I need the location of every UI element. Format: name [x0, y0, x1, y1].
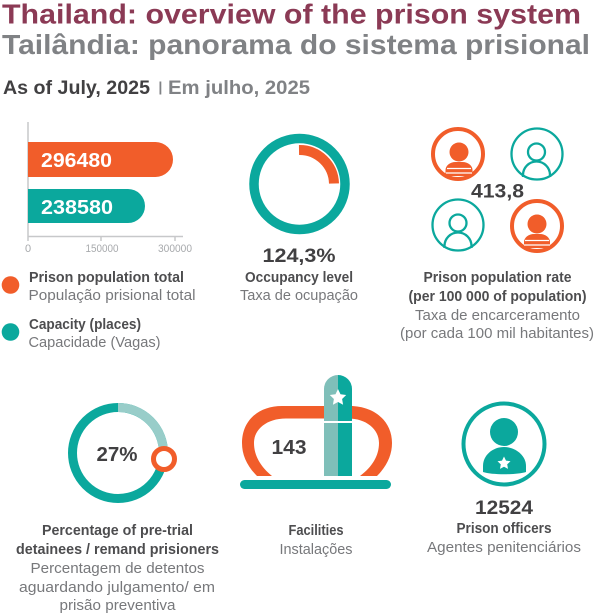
panel: pre-trial detainees: prisão preventiva — [60, 598, 176, 614]
pre-trial ring — [72, 408, 174, 498]
panel: facilities: 143 — [272, 437, 306, 459]
panel: prison population rate: (per 100 000 of population) — [408, 289, 587, 305]
panel: prison population rate: Prison population rate — [424, 270, 572, 286]
legend: Prison population total — [29, 270, 184, 286]
panel: pre-trial detainees — [16, 408, 219, 614]
date subtitle — [3, 78, 310, 99]
panel: occupancy level — [240, 138, 358, 304]
panel: pre-trial detainees: Percentagem de detentos — [30, 561, 204, 577]
panel: prison population rate: (por cada 100 mil habitantes) — [400, 326, 594, 342]
panel: pre-trial detainees: aguardando julgamento/ em — [19, 580, 215, 596]
panel: prison population rate: Taxa de encarceramento — [415, 308, 580, 324]
panel: prison officers: Prison officers — [456, 521, 552, 537]
icon: prisoner — [512, 201, 562, 251]
icon: officer — [464, 404, 544, 484]
panel: pre-trial detainees: Percentage of pre-trial — [42, 523, 193, 539]
title — [2, 0, 590, 60]
axis labels: 150000 — [86, 243, 118, 255]
axis labels: 0 — [25, 243, 31, 255]
panel: pre-trial detainees: 27% — [96, 444, 138, 466]
bar: prison population: 296480 — [41, 149, 112, 172]
title: Tailândia: panorama do sistema prisional — [2, 29, 590, 60]
date subtitle: As of July, 2025 — [3, 78, 150, 99]
legend: Capacity (places) — [29, 317, 141, 333]
panel: prison officers: 12524 — [475, 497, 533, 519]
panel: facilities: Instalações — [280, 542, 352, 558]
bar: capacity: 238580 — [41, 196, 113, 219]
axis labels — [25, 243, 192, 255]
date subtitle: Em julho, 2025 — [168, 78, 310, 99]
panel: prison population rate — [400, 128, 594, 342]
icon: prison facility — [240, 375, 392, 489]
bar: capacity — [28, 189, 145, 223]
panel: bar chart — [25, 122, 192, 255]
panel: occupancy level: 124,3% — [262, 245, 336, 267]
legend — [2, 270, 196, 351]
legend: Capacidade (Vagas) — [28, 335, 160, 351]
icon: prisoner — [433, 129, 483, 179]
icon: person outline — [512, 128, 562, 180]
panel: occupancy level: Taxa de ocupação — [240, 288, 358, 304]
bar: prison population — [28, 142, 173, 177]
panel: occupancy level: Occupancy level — [245, 270, 353, 286]
panel: prison officers — [427, 404, 581, 556]
panel: prison officers: Agentes penitenciários — [427, 540, 581, 556]
panel: facilities — [240, 375, 392, 558]
occupancy ring — [254, 138, 345, 230]
legend: População prisional total — [28, 288, 196, 304]
icon: person outline — [432, 200, 484, 250]
panel: facilities: Facilities — [288, 523, 344, 539]
panel: prison population rate: 413,8 — [471, 180, 524, 202]
panel: pre-trial detainees: detainees / remand prisioners — [16, 542, 219, 558]
axis labels: 300000 — [158, 243, 192, 255]
